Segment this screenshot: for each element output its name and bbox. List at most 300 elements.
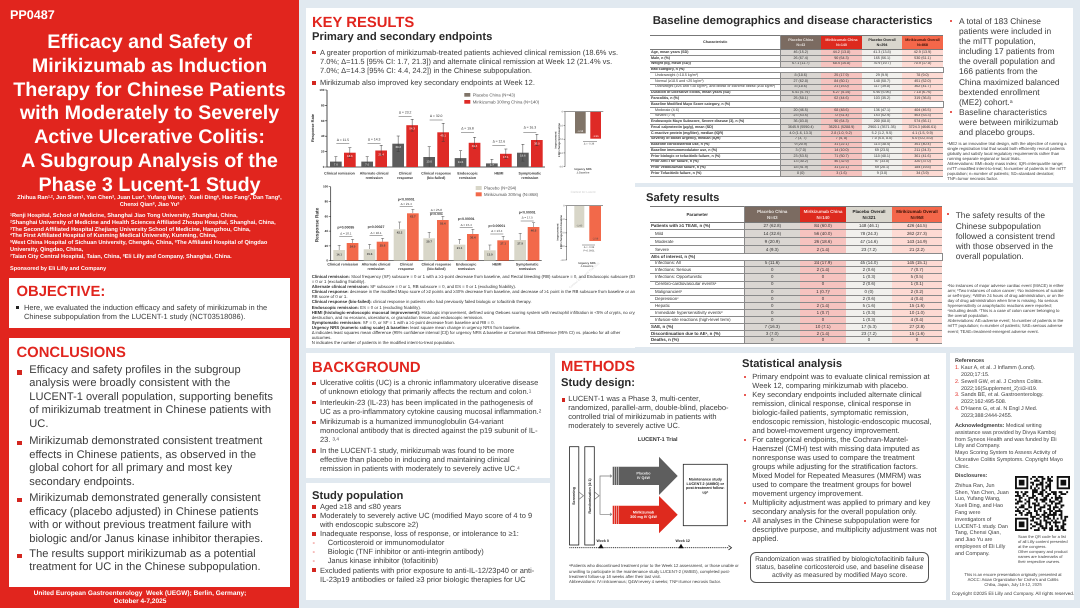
table: safety: 145 (15.1) — [907, 260, 927, 265]
table: safety: 4 (0.4) — [911, 296, 923, 301]
subheading: statistical analysis: Statistical analysis — [742, 358, 842, 370]
background bullet 3 — [320, 417, 538, 444]
timeline with week markers — [569, 539, 732, 550]
table: safety: 0 — [771, 337, 773, 342]
study population criteria: IL-23p19 antibodies or failed ≥3 prior biologic therapies for UC — [320, 575, 525, 584]
table: safety: 262 (27.3) — [907, 231, 927, 236]
chart definitions footnote: RB score of 0 or 1. — [312, 294, 348, 299]
bar chart: China response rate: Clinical — [399, 172, 412, 176]
baseline summary bullets: 166 patients from the — [959, 66, 1038, 76]
table: baseline characteristics: Baseline immunomodulator use, n (%) — [651, 148, 717, 152]
chart definitions footnote: Clinical remission: Stool frequency (SF) subscore = 0 or 1 with a ≥1-point decrease from baseline, and Rectal bleeding (RB) subscore = 0, and Endoscopic subscore (ES) — [312, 274, 638, 279]
table: baseline characteristics: Endoscopic Mayo Subscore, Severe disease (3), n (%) — [651, 119, 744, 123]
congress footer — [34, 590, 246, 605]
disclosures: Luo, Yufang Wang, — [955, 496, 1001, 502]
study population criteria: Aged ≥18 and ≤80 years — [320, 502, 401, 511]
table: baseline characteristics: 574 (66.1) — [914, 119, 931, 123]
table: safety: 148 (46.1) — [859, 223, 879, 228]
key results bullet 1: 7.0%; Δ=11.5 [95% CI: 1.7, 21.3]) and alternate clinical remission at Week 12 (21.4% vs. — [320, 57, 612, 66]
bar chart: overall response rate: 27.1 — [500, 242, 506, 246]
table: baseline characteristics: 463 (53.3) — [914, 113, 931, 117]
statistical analysis text: and bowel-movement urgency improvement. — [752, 426, 900, 435]
table: safety: Infections: Serious — [655, 267, 691, 272]
statistical analysis text: remission, clinical response, clinical response in — [752, 399, 911, 408]
diagram footnote: Abbreviations: IV=intravenous; Q4W=every 4 weeks; TNF=tumor necrosis factor. — [569, 579, 721, 584]
table: safety: 23 (7.2) — [861, 247, 877, 252]
table: baseline characteristics: 320 (37.0) — [914, 159, 931, 163]
background bullet 1: of unknown etiology that primarily affects the rectum and colon.1 — [320, 387, 531, 396]
bar chart: overall response rate: Δ = 13.4 — [491, 229, 503, 233]
references: 2023;388:2444-2455. — [961, 413, 1012, 419]
background bullet 2: UC as a pro-inflammatory cytokine causing mucosal inflammation.2 — [320, 407, 541, 416]
conclusion 1: UC. — [29, 418, 48, 430]
bar chart: China response rate: Δ = 32.0 — [430, 114, 443, 118]
table: safety: 5 (0.5) — [911, 274, 923, 279]
table: baseline characteristics: 2.8 (1.0, 9.2) — [831, 131, 852, 135]
table: safety: 0 — [771, 289, 773, 294]
arrow: mirikizumab arm: 300 mg IV Q4W — [630, 515, 657, 519]
bar chart: overall response rate: HEMI — [492, 262, 501, 266]
bar chart: China response rate: response — [397, 176, 413, 180]
affiliations: 5West China Hospital of Sichuan University, Chengdu, China, 6The Affiliated Hospital of Qingdao — [10, 240, 267, 246]
QR caption: at the congress. — [1018, 544, 1046, 549]
table: baseline characteristics: C-reactive protein (mg/liter), median (IQR) — [651, 131, 723, 135]
table: baseline characteristics: 71 (50.7) — [834, 154, 849, 158]
bar chart: China response rate: 54.3 — [409, 126, 415, 130]
background bullet 2 — [320, 398, 542, 416]
background bullet 3: monoclonal antibody that is directed against the p19 subunit of IL- — [320, 426, 538, 435]
table: baseline characteristics: 42.9 (13.9) — [914, 50, 931, 54]
study design text: LUCENT-1 was a Phase 3, multi-center, — [568, 394, 700, 403]
table: baseline characteristics: Prior biologic or tofacitinib failure, n (%) — [651, 154, 720, 158]
baseline summary bullets — [959, 16, 1060, 137]
table: baseline characteristics: 530 (61.1) — [914, 56, 931, 60]
bar chart: overall response rate: 36.4 — [470, 236, 476, 240]
background bullet 4 — [320, 446, 520, 473]
bar chart: China response rate: Δ = 11.5 — [337, 138, 349, 142]
table: safety: 45 (14.0) — [860, 260, 878, 265]
table: baseline characteristics: 25 (17.9) — [834, 73, 849, 77]
table: safety: SAE, n (%) — [651, 324, 673, 329]
subheading: endpoints: Primary and secondary endpoints — [312, 31, 492, 43]
chart definitions footnote — [312, 274, 638, 345]
box: maintenance study: LUCENT-2 (AMBG) or — [687, 482, 725, 486]
table: baseline characteristics — [650, 35, 944, 177]
statistical analysis text — [752, 372, 937, 543]
table: baseline characteristics: 46 (32.9) — [834, 159, 849, 163]
table: baseline characteristics: N=868 — [917, 43, 928, 47]
chart definitions footnote: outcomes. — [312, 335, 332, 340]
title: with Moderately to Severely — [20, 102, 279, 124]
chart definitions footnote: Endoscopic remission: ES = 0 or 1 (excluding friability). — [312, 305, 421, 310]
box: randomization: Randomization (4:1) — [588, 478, 592, 514]
table: safety: 2 (0.6) — [863, 281, 875, 286]
bar chart: overall response rate: 42.2 — [397, 230, 403, 234]
bar chart: China response rate: 30.2 — [395, 145, 401, 149]
box: maintenance study — [683, 464, 727, 526]
title — [13, 31, 286, 196]
table: baseline characteristics: Prior Vedolizumab failure, n (%) — [651, 165, 706, 169]
table: safety: 0 — [771, 274, 773, 279]
bar chart: overall response rate: 24.0 — [350, 244, 356, 248]
table: safety: Mild — [655, 231, 663, 236]
table: baseline characteristics: 0 (0) — [797, 171, 804, 175]
panel: objective — [9, 278, 290, 328]
objective text: Here, we evaluated the induction efficacy and safety of mirikizumab in the — [24, 303, 267, 312]
table: safety: 1 (0.3) — [863, 317, 875, 322]
table: safety: N=43 — [767, 214, 778, 220]
congress footer: October 4-7,2025 — [114, 598, 166, 605]
table: baseline characteristics: 404 (46.5) — [914, 108, 931, 112]
bar chart: overall urgency NRS: Urgency NRS — [578, 262, 596, 265]
conclusion 1: Efficacy and safety profiles in the subgroup — [29, 364, 241, 376]
bar chart: overall response rate: 63.7 — [410, 214, 416, 218]
baseline summary bullets: were between mirikizumab — [959, 117, 1058, 127]
encore presentation note — [964, 572, 1062, 587]
diagram: LUCENT-1 trial design — [569, 437, 732, 550]
panel: study population: - — [312, 556, 315, 565]
bar chart: overall response rate — [314, 185, 542, 271]
table: baseline characteristics: 20 (46.5) — [793, 108, 808, 112]
diagram title: LUCENT-1 Trial — [638, 437, 678, 443]
table: baseline characteristics: 118 (40.1) — [874, 154, 890, 158]
table: safety: 0 — [771, 310, 773, 315]
bar chart: China response rate: 40 — [321, 134, 325, 138]
table: baseline characteristics: 23 (53.5) — [793, 154, 808, 158]
safety summary bullet: Chinese subpopulation — [956, 221, 1041, 231]
table: safety: Infusion-site reactions (high-level term) — [655, 317, 731, 322]
table: safety: 1 (0.7) — [817, 310, 829, 315]
bar chart: overall response rate: remission — [519, 267, 536, 271]
references: 2022;162:495-508. — [961, 399, 1006, 405]
table: baseline characteristics: 7 (3, 7) — [795, 136, 807, 140]
conclusion 3: Mirikizumab demonstrated generally consistent — [29, 492, 261, 504]
table: baseline characteristics: 41.3 (13.8) — [873, 50, 891, 54]
safety footnote: eincluding death. fThis is a case of colon cancer belonging to — [948, 308, 1059, 313]
table: baseline characteristics: 136 (47.1) — [874, 108, 890, 112]
table: safety: 5 (11.6) — [765, 260, 780, 265]
bar chart: overall urgency NRS: P<0.0001 — [583, 250, 595, 252]
legend: China: Placebo China (N=43) — [473, 92, 516, 97]
safety footnote: arm; bTwo instances of colon cancer; cNo incidences of suicide — [948, 288, 1064, 293]
baseline footnote: TNF=tumor necrosis factor. — [947, 176, 998, 181]
table: safety: 2 (1.4) — [817, 331, 829, 336]
encore presentation note: Chiba, Japan, July 10-12, 2025 — [984, 582, 1042, 587]
bar chart: overall response rate: Δ = 17.5 — [522, 216, 533, 220]
table: safety: 84 (60.0) — [814, 223, 832, 228]
chart definitions footnote: Alternate clinical remission: SF subscore = 0 or 1, RB subscore = 0, and ES = 0 or 1 (excluding friability). — [312, 284, 516, 289]
bar chart: China response rate: Δ = 19.8 — [461, 126, 474, 130]
table: baseline characteristics: Weight (kg, mean (SD)) — [651, 61, 691, 65]
baseline footnote — [947, 141, 1067, 181]
affiliations: University, Qingdao, China, — [10, 247, 83, 253]
safety summary bullet — [956, 210, 1055, 261]
conclusion 2: effects in Chinese patients, as observed in the — [29, 449, 256, 461]
bar chart: overall response rate: 15.6 — [367, 252, 373, 256]
acknowledgments: Mayo Scoring System to Assess Activity of — [955, 450, 1056, 456]
table: baseline characteristics: 18 (41.9) — [793, 165, 808, 169]
QR caption: names are trademarks of — [1018, 554, 1062, 559]
table: safety: 0 — [822, 337, 824, 342]
affiliations: 7Taian City Central Hospital, Taian, China, 8Eli Lilly and Company, Shanghai, China. — [10, 254, 232, 260]
safety footnote: Abbreviations: AE=adverse event; N=number of patients in the — [948, 318, 1063, 323]
references: 2. Sewell GW, et al. J Crohns Colitis. — [955, 379, 1043, 385]
table: baseline characteristics: Placebo Overall — [868, 38, 896, 42]
baseline summary bullets: (ME2) cohort.a — [959, 97, 1013, 107]
table: baseline characteristics: 6.90 (6.95) — [873, 90, 891, 94]
table: safety: 4 (9.3) — [766, 247, 779, 252]
study population criteria: Janus kinase inhibitor (tofacitinib) — [328, 556, 438, 565]
panel: safety results — [635, 187, 1073, 347]
background bullet 3: Mirikizumab is a humanized immunoglobulin G4-variant — [320, 417, 503, 426]
table: baseline characteristics: Fecal calprotectin (µg/g), mean (SD) — [651, 125, 713, 129]
table: safety: 27 (62.8) — [763, 223, 781, 228]
chart definitions footnote: Urgency NRS (numeric rating scale) Δ baseline: least square mean change in urgency NRS from baseline. — [312, 325, 520, 330]
table: safety: 47 (14.6) — [860, 239, 878, 244]
bar chart: China response rate: Response Rate — [310, 113, 315, 142]
references — [955, 358, 1044, 419]
table: safety: 10 (7.1) — [815, 324, 831, 329]
objective text: Chinese subpopulation from the LUCENT-1 study (NCT03518086). — [24, 312, 245, 321]
table: baseline characteristics: 8 (18.6) — [794, 73, 807, 77]
baseline summary bullets: the overall population and — [959, 56, 1055, 66]
references: 4. D'Haens G, et al. N Engl J Med. — [955, 406, 1037, 412]
bar chart: overall response rate: p<0.001 — [430, 212, 443, 216]
table: baseline characteristics: Prior Anti-TNF failure, n (%) — [651, 159, 699, 163]
table: baseline characteristics: 319 (36.8) — [914, 96, 931, 100]
table: baseline characteristics: 44.2 (13.8) — [833, 50, 850, 54]
heading: study population: Study population — [312, 490, 403, 502]
bar chart: overall response rate: p<0.00001 — [519, 211, 536, 215]
conclusion 2 — [29, 435, 262, 488]
chart: China subpopulation response rates — [310, 88, 604, 180]
QR caption — [1018, 534, 1068, 564]
chart definitions footnote: destruction, and no erosions, ulcerations, or granulation tissue; and endoscopic remission. — [312, 315, 483, 320]
panel: study population — [306, 483, 550, 600]
table: safety: Mirikizumab Overall — [896, 209, 938, 214]
bar chart: overall response rate: Δ = 10.1 — [370, 231, 382, 235]
table: baseline characteristics: Duration of ulcerative colitis, mean years (SD) — [651, 90, 731, 94]
table: safety: 2 (1.4) — [817, 303, 829, 308]
statistical analysis text: nonresponse was used to compare the treatment — [752, 453, 915, 462]
table: baseline characteristics: 13 (30.2) — [793, 159, 808, 163]
copyright: Copyright ©2025 Eli Lilly and Company. All rights reserved. — [952, 591, 1074, 596]
table: safety: 0 (0) — [864, 289, 874, 294]
table: safety: 7 (0.7) — [911, 267, 923, 272]
table: baseline characteristics: 211 (24.3) — [914, 148, 931, 152]
bar chart: China response rate: 17.1 — [503, 155, 509, 159]
table: baseline characteristics: 165 (56.1) — [874, 56, 890, 60]
subheading: study design: Study design: — [561, 377, 635, 389]
table: safety: 9 (20.9) — [765, 239, 780, 244]
bar chart: overall response rate: Clinical response — [421, 262, 451, 266]
bar chart: overall urgency NRS: Improvement — [556, 223, 560, 240]
table: safety: 56 (40.0) — [814, 231, 832, 236]
disclosures: Zhihua Ran, Jun — [955, 483, 995, 489]
table: safety: 1 (0.3) — [863, 274, 875, 279]
baseline footnote: mITT=modified intent-to-treat; N=number of patients in the mITT — [947, 166, 1066, 171]
safety footnote — [948, 283, 1064, 334]
encore presentation note: This is an encore presentation originally presented at — [964, 572, 1062, 577]
bar chart: overall response rate: Symptomatic — [516, 262, 538, 266]
table: baseline characteristics: 153 (52.9) — [874, 113, 890, 117]
disclosures: and Jiao Yu are — [955, 537, 992, 543]
table: baseline characteristics: 200 (68.0) — [874, 119, 890, 123]
heading: conclusions: CONCLUSIONS — [16, 345, 126, 361]
bar chart: China urgency NRS: Urgency NRS — [574, 168, 592, 171]
table: safety: N=321 — [862, 214, 876, 220]
study population criteria: Excluded patients with prior exposure to anti-IL-12/23p40 or anti- — [320, 566, 534, 575]
table: baseline characteristics: Severe (7-9) — [655, 113, 675, 117]
references: 3. Sands BE, et al. Gastroenterology. — [955, 392, 1044, 398]
legend: overall: Placebo (N=294) — [484, 186, 517, 191]
bar chart: overall response rate: Clinical — [400, 262, 413, 266]
table: safety: Infections: All — [655, 260, 681, 265]
table: safety: N=958 — [910, 214, 924, 220]
panel: study population: - — [312, 547, 315, 556]
table: baseline characteristics: 361 (41.6) — [914, 154, 931, 158]
bar chart: China response rate: 21.4 — [378, 152, 384, 156]
key results bullet 2: Mirikizumab also improved key secondary endpoints at Week 12. — [320, 78, 535, 87]
key results bullet 1: A greater proportion of mirikizumab-treated patients achieved clinical remission (18.6% vs. — [320, 48, 618, 57]
table: safety: 2 (0.6) — [863, 296, 875, 301]
table: baseline characteristics: 3645.9 (5590.4) — [788, 125, 814, 129]
table: baseline characteristics: Overweight (≥25 and <30 kg/m²), and obese or extreme obese (≥30 kg/m²) — [655, 84, 775, 88]
QR caption: Scan the QR code for a list — [1018, 534, 1066, 539]
background bullet 4: In the LUCENT-1 study, mirikizumab was found to be more — [320, 446, 514, 455]
table: baseline characteristics: 26 (67.4) — [793, 56, 808, 60]
references: 1. Kaur A, et al. J Inflamm (Lond). — [955, 365, 1035, 371]
table: baseline characteristics: 62 (44.6) — [834, 96, 849, 100]
bar chart: overall urgency NRS: -2.59 — [592, 238, 599, 240]
bar chart: China urgency NRS: Δ = -0.38 — [584, 143, 595, 146]
table: baseline characteristics: 29 (9.9) — [876, 73, 888, 77]
table: baseline characteristics: 6.0 (5.0, 8.0) — [912, 136, 933, 140]
bar chart: China urgency NRS: LSM change from baseline — [558, 122, 561, 157]
table: safety: 0 — [771, 296, 773, 301]
safety footnote: the overall population. — [948, 313, 989, 318]
statistical analysis text: endoscopic remission, histologic-endoscopic mucosal, — [752, 417, 932, 426]
bar chart: China urgency NRS — [555, 110, 603, 175]
box: maintenance study: Maintenance study — [689, 478, 723, 482]
statistical analysis text: Haenszel (CMH) test with missing data imputed as — [752, 444, 920, 453]
table: safety: 7 (16.3) — [765, 324, 780, 329]
table: baseline characteristics: 9 (3.0) — [877, 171, 887, 175]
box: screening — [570, 447, 579, 545]
arrow: mirikizumab arm — [613, 496, 678, 533]
bar chart: overall response rate: response — [398, 267, 414, 271]
table: safety: Parameter — [686, 212, 708, 217]
box: screening: Screening — [572, 487, 576, 505]
heading: background: BACKGROUND — [312, 360, 421, 376]
bar chart: China urgency NRS: Improvement — [555, 131, 558, 148]
table: baseline characteristics: 23 (53.5) — [793, 113, 808, 117]
affiliations: 1Renji Hospital, School of Medicine, Shanghai Jiao Tong University, Shanghai, China, — [10, 213, 238, 219]
table: baseline characteristics: Mirikizumab China — [825, 38, 858, 42]
baseline summary bullets: the mITT population, — [959, 36, 1036, 46]
title: A Subgroup Analysis of the — [21, 150, 278, 172]
bar chart: China response rate: 7.0 — [365, 163, 370, 167]
table: baseline characteristics: 70.9 (19.7) — [873, 61, 891, 65]
baseline footnote: single registration trial that would both efficiently recruit patients — [947, 146, 1065, 151]
bar chart: overall response rate: 27.9 — [517, 242, 523, 246]
table: safety: Patients with ≥1 TEAE, n (%) — [651, 223, 710, 228]
table: baseline characteristics: N=294 — [877, 43, 887, 47]
conclusion 1: LUCENT-1 overall population, supporting benefits — [29, 391, 273, 403]
bar chart: China response rate: 45.1 — [440, 134, 446, 138]
table: safety: 2 (1.4) — [817, 267, 829, 272]
panel: conclusions — [9, 338, 290, 587]
conclusion 1: of mirikizumab treatment in Chinese patients with — [29, 404, 271, 416]
table: baseline characteristics: 148 (50.7) — [874, 79, 890, 83]
disclosures: Tang, Chenxi Qian, — [955, 530, 1001, 536]
bar chart: China response rate — [310, 88, 545, 180]
table: safety: 0 — [822, 317, 824, 322]
table: baseline characteristics: Pancolitis, n (%) — [651, 96, 679, 100]
table: safety: N=140 — [816, 214, 830, 220]
table: safety: 15 (1.6) — [909, 331, 925, 336]
table: baseline characteristics: 25 (58.1) — [793, 96, 808, 100]
table: baseline characteristics: 7.0 (5.0, 8.0) — [872, 136, 892, 140]
table: baseline characteristics: 31 (22.1) — [834, 165, 849, 169]
table: baseline characteristics: 78 (9.0) — [916, 73, 929, 77]
arrow: placebo arm: IV Q4W — [637, 476, 650, 480]
bar chart: China response rate: 0 — [323, 165, 325, 169]
study population criteria: Inadequate response, loss of response, or intolerance to ≥1: — [320, 529, 519, 538]
disclosures: and Company. — [955, 551, 990, 557]
callout: randomization stratification: Randomization was stratified by biologic/tofacitinib failure — [755, 556, 924, 563]
conclusion 1: analysis were broadly consistent with the — [29, 377, 230, 389]
heading: key results: KEY RESULTS — [312, 15, 414, 31]
conclusion 3: efficacy (placebo adjusted) in Chinese patients — [29, 506, 259, 518]
authors: Zhihua Ran1,2, Jun Shen1, Yan Chen3, Juan Luo4, Yufang Wang5, Xueli Ding6, Hao Fang7, Dan Tang8, — [17, 195, 282, 201]
table: baseline characteristics: 84 (60.1) — [834, 79, 849, 83]
study design text: controlled trial of mirikizumab in patients with — [568, 412, 716, 421]
diagram footnote: aPatients who discontinued treatment prior to the Week 12 assessment, or those unable or — [569, 563, 739, 568]
safety footnote: day of drug administration when time is missing. No serious — [948, 298, 1058, 303]
bar chart: overall response rate: Δ = 25.8 — [431, 208, 442, 212]
bar chart: overall urgency NRS: 0 — [563, 204, 565, 208]
table: safety: 17 (5.3) — [861, 324, 877, 329]
study population criteria — [320, 502, 534, 584]
table: baseline characteristics: 46 (15.2) — [793, 50, 808, 54]
table: baseline characteristics: 3 (1.6) — [836, 171, 847, 175]
bar chart: overall response rate: p<0.00001 — [398, 198, 415, 202]
bar chart: China response rate: 100 — [319, 88, 325, 92]
table: safety: 0 — [771, 267, 773, 272]
table: baseline characteristics: 36 (83.8) — [793, 119, 808, 123]
baseline footnote: Abbreviations: BMI=body mass index; IQR=interquartile range; — [947, 161, 1063, 166]
table: baseline characteristics: 451 (52.0) — [914, 79, 931, 83]
table: baseline characteristics: 27 (62.8) — [793, 79, 808, 83]
bar chart: overall urgency NRS: -3.0 — [560, 245, 565, 248]
baseline summary bullets: bextended enrollment — [959, 87, 1040, 97]
table: safety: Infections: Opportunistic — [655, 274, 702, 279]
bar chart: China response rate: 11.6 — [458, 160, 464, 164]
bar chart: China response rate: 31.4 — [472, 144, 478, 148]
bar chart: overall response rate: Δ = 21.4 — [401, 202, 412, 206]
bar chart: China response rate: 7.0 — [334, 163, 338, 167]
table: safety: Moderate — [655, 239, 674, 244]
baseline footnote: running separate regional or local trials. — [947, 156, 1021, 161]
table: safety: 26 (18.6) — [814, 239, 832, 244]
diagram footnote: unwilling to participate in the maintenance study LUCENT-2 (AMBG), completed post- — [569, 569, 730, 574]
acknowledgments: Clinic. — [955, 464, 970, 470]
bar chart: overall response rate: p<0.00001 — [458, 217, 475, 221]
table: safety: 2 (1.4) — [817, 247, 829, 252]
bar chart: China response rate: remission — [366, 176, 383, 180]
study design text: randomized, parallel-arm, double-blind, placebo- — [568, 403, 729, 412]
